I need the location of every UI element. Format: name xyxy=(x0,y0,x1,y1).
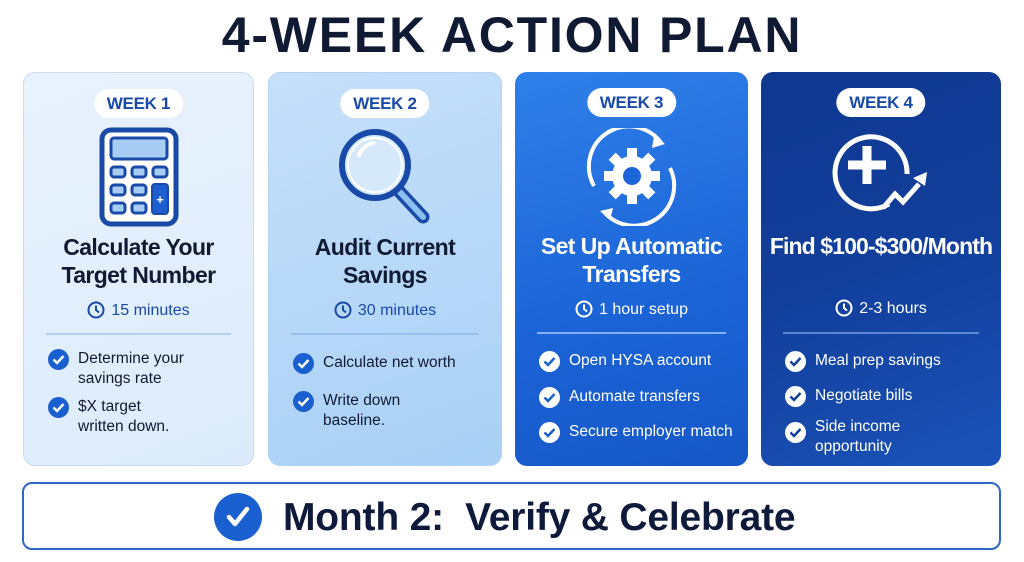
time: 30 minutes xyxy=(358,302,436,319)
heading: Find $100-$300/Month xyxy=(770,233,992,259)
pill: week 2 xyxy=(340,89,430,118)
time: 2-3 hours xyxy=(859,300,927,317)
bullet xyxy=(785,386,912,407)
heading: Target Number xyxy=(61,262,216,288)
icon: gear cycle xyxy=(586,128,676,226)
bullet: opportunity xyxy=(815,438,892,455)
bullet xyxy=(539,387,700,408)
panel: week 2 xyxy=(268,72,502,466)
bullet: Calculate net worth xyxy=(323,354,456,371)
banner: month 2 xyxy=(22,482,1001,550)
icon: calculator xyxy=(100,128,178,226)
bullet: Write down xyxy=(323,392,400,409)
bullet: Side income xyxy=(815,418,900,435)
pill: week 1 xyxy=(94,89,183,118)
heading: Audit Current xyxy=(315,234,455,260)
panel: week 1 xyxy=(23,72,254,466)
bullet xyxy=(48,397,169,435)
icon: magnifier xyxy=(339,129,430,224)
bullet xyxy=(539,422,733,443)
bullet xyxy=(48,349,184,387)
pill: week 3: WEEK 3 xyxy=(600,93,663,112)
bullet: Automate transfers xyxy=(569,388,700,405)
heading: Calculate Your xyxy=(63,234,214,260)
pill: week 4: WEEK 4 xyxy=(849,93,913,112)
bullet xyxy=(293,391,400,429)
bullet: Meal prep savings xyxy=(815,352,941,369)
bullet: savings rate xyxy=(78,370,162,387)
pill: week 3 xyxy=(587,88,676,117)
bullet: written down. xyxy=(78,418,169,435)
icon: plus growth xyxy=(832,134,927,212)
time: 1 hour setup xyxy=(599,301,688,318)
icon: calculator: + xyxy=(156,192,164,207)
heading: Set Up Automatic xyxy=(541,233,722,259)
pill: week 2: WEEK 2 xyxy=(353,94,417,113)
time: 15 minutes xyxy=(111,302,190,319)
heading xyxy=(541,233,722,287)
pill: week 1: WEEK 1 xyxy=(107,94,170,113)
bullet xyxy=(539,351,712,372)
bullet: Open HYSA account xyxy=(569,352,711,369)
heading xyxy=(61,234,216,288)
bullet: Determine your xyxy=(78,350,184,367)
pill: week 4 xyxy=(836,88,926,117)
icon: check circle xyxy=(214,493,262,541)
heading xyxy=(315,234,456,288)
heading: Savings xyxy=(343,262,427,288)
heading: Transfers xyxy=(582,261,681,287)
panel: week 3 xyxy=(515,72,748,466)
bullet: baseline. xyxy=(323,412,385,429)
bullet xyxy=(785,351,941,372)
bullet: $X target xyxy=(78,398,141,415)
banner text: Month 2: Verify & Celebrate xyxy=(283,496,795,539)
bullet: Negotiate bills xyxy=(815,387,912,404)
bullet xyxy=(293,353,456,374)
bullet: Secure employer match xyxy=(569,423,733,440)
panel: week 4 xyxy=(761,72,1001,466)
bullet xyxy=(785,418,900,455)
title: 4-WEEK ACTION PLAN xyxy=(222,7,802,63)
